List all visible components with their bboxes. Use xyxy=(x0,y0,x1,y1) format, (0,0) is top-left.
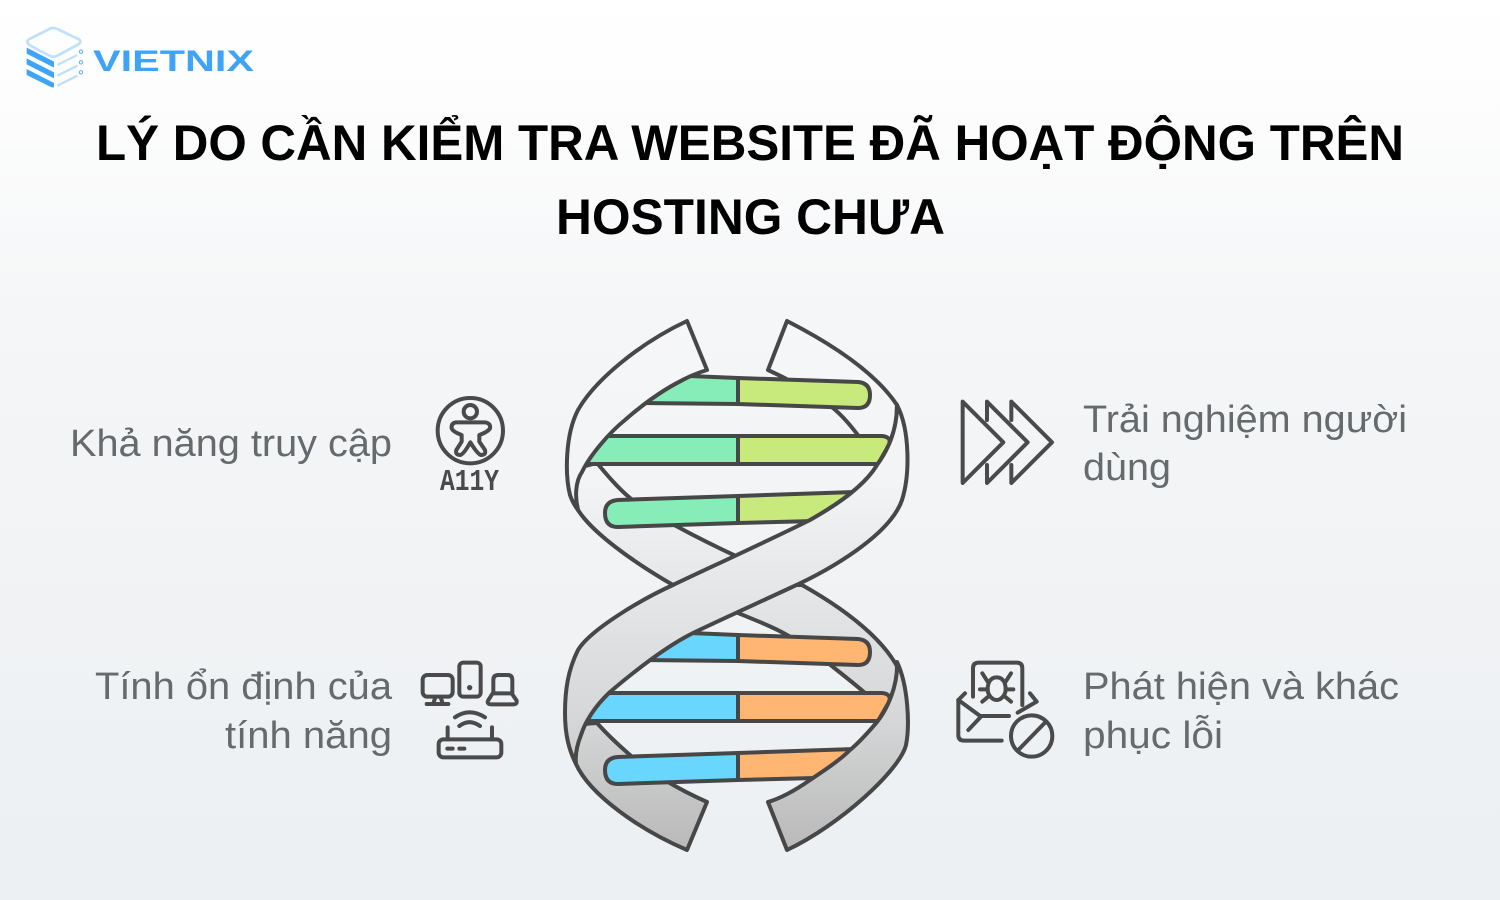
back ribbon: top right xyxy=(768,321,897,470)
text: feature stability: Tính ổn định của xyxy=(95,666,393,708)
logo wordmark: VIETNIX xyxy=(93,45,254,78)
bar 1 right xyxy=(738,378,870,408)
bar 2 left xyxy=(585,436,738,464)
bar 6 right xyxy=(738,749,855,780)
back ribbon: middle strand xyxy=(570,463,905,725)
text: feature stability xyxy=(95,666,393,757)
bar 4 right xyxy=(738,635,870,665)
text: user experience: dùng xyxy=(1083,447,1171,489)
title xyxy=(96,114,1404,245)
icon: server stack xyxy=(27,28,83,87)
icon: devices and router xyxy=(423,663,517,757)
bar 5 right xyxy=(738,693,890,721)
bar 3 left xyxy=(605,496,738,527)
bar 3 right xyxy=(738,492,855,523)
bar 2 right xyxy=(738,436,890,464)
front ribbon: top left xyxy=(567,321,707,510)
back ribbon: bottom left xyxy=(570,723,707,850)
bar 4 left xyxy=(640,633,738,661)
icon: accessibility A11Y xyxy=(438,398,503,500)
front ribbon: central crossing xyxy=(565,405,907,764)
text: bug detection: phục lỗi xyxy=(1083,714,1223,757)
title: LÝ DO CẦN KIỂM TRA WEBSITE ĐÃ HOẠT ĐỘNG TRÊN xyxy=(96,114,1404,171)
icon: accessibility A11Y: A11Y xyxy=(440,465,499,500)
front ribbon: bottom right xyxy=(768,662,908,850)
bar 5 left xyxy=(585,693,738,721)
text: user experience xyxy=(1083,399,1407,489)
text: user experience: Trải nghiệm người xyxy=(1083,399,1407,441)
bar 1 left xyxy=(640,376,738,404)
title: HOSTING CHƯA xyxy=(556,189,945,245)
icon: bug with envelope and prohibition xyxy=(958,663,1052,757)
bar group: lower blue and orange xyxy=(585,633,890,784)
bar group: upper green and lime xyxy=(585,376,890,527)
icon: fast forward chevrons xyxy=(963,402,1052,483)
text: accessibility: Khả năng truy cập xyxy=(70,423,392,465)
text: bug detection xyxy=(1083,666,1399,757)
bar 6 left xyxy=(605,753,738,784)
text: feature stability: tính năng xyxy=(225,715,392,757)
logo: Vietnix xyxy=(27,28,254,87)
text: bug detection: Phát hiện và khác xyxy=(1083,666,1399,708)
DNA helix xyxy=(565,321,908,850)
